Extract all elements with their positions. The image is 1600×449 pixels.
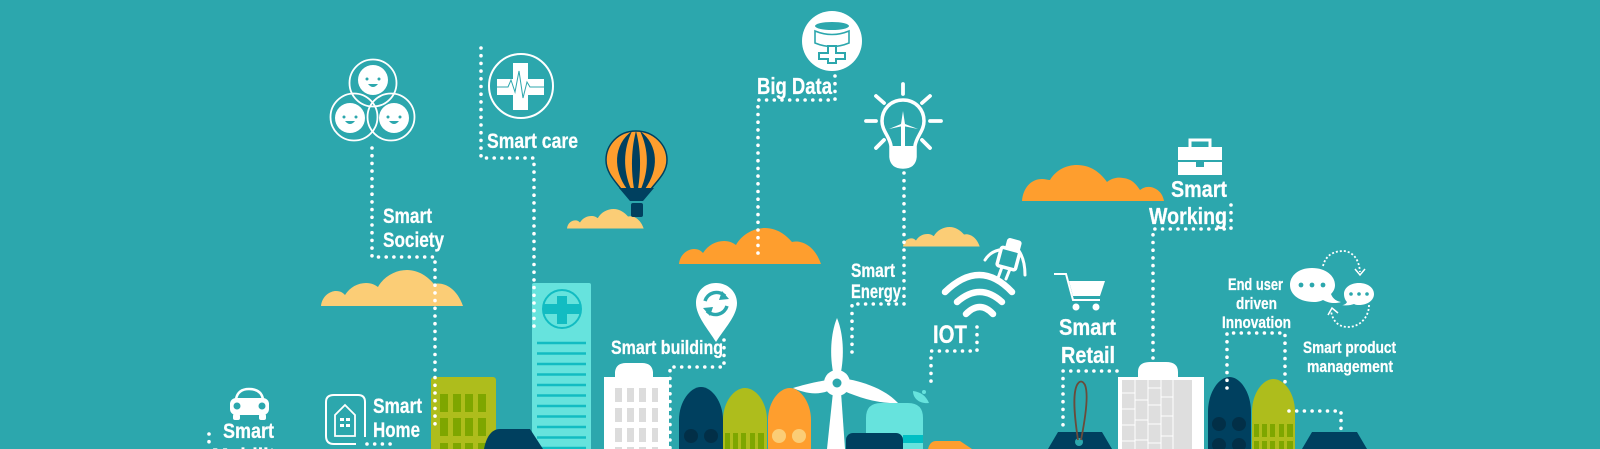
building: white smart building bbox=[604, 363, 669, 449]
cloud: pale large bbox=[321, 270, 463, 306]
icon: car bbox=[230, 389, 269, 420]
icon: hot air balloon bbox=[606, 131, 667, 217]
label: Smart Home bbox=[373, 395, 422, 442]
dome: orange bbox=[768, 388, 811, 449]
label: Smart Society: Society bbox=[383, 229, 444, 252]
label: Smart Energy bbox=[851, 261, 901, 303]
building: green left bbox=[431, 377, 496, 449]
label: End user driven Innovation bbox=[1222, 275, 1291, 332]
dome: navy bbox=[679, 387, 723, 449]
icon: speech bubbles with cycle bbox=[1290, 251, 1374, 327]
label: Smart product management bbox=[1303, 338, 1396, 376]
dotted connector lines bbox=[209, 48, 1341, 449]
building: hospital tower bbox=[532, 283, 591, 449]
cloud: orange centre bbox=[679, 228, 821, 264]
label: Smart product management: Smart product bbox=[1303, 338, 1396, 357]
label: Smart Working: Smart bbox=[1171, 176, 1227, 202]
wind turbine bbox=[793, 318, 898, 449]
label: Smart Society bbox=[383, 205, 444, 252]
label: End user driven Innovation: Innovation bbox=[1222, 313, 1291, 332]
label: Smart Energy: Energy bbox=[851, 282, 901, 303]
cloud: pale small left bbox=[567, 209, 644, 228]
icon: briefcase bbox=[1178, 140, 1222, 175]
dome: green bbox=[723, 388, 767, 449]
label: Smart Energy: Smart bbox=[851, 261, 896, 282]
icon: shopping cart bbox=[1054, 274, 1105, 310]
label: Smart Mobility bbox=[212, 420, 286, 449]
icon: location pin with refresh bbox=[696, 283, 737, 342]
label: End user driven Innovation: driven bbox=[1236, 294, 1277, 313]
label: Smart Home: Smart bbox=[373, 395, 422, 418]
cloud: pale small right bbox=[903, 227, 980, 246]
building: white grid tower bbox=[1118, 362, 1204, 449]
icon: database, big data bbox=[802, 11, 862, 71]
building: orange roof bbox=[928, 441, 972, 449]
building: dark roof left bbox=[484, 429, 543, 449]
label: Smart building: Smart building bbox=[611, 338, 723, 359]
label: End user driven Innovation: End user bbox=[1228, 275, 1283, 294]
dome: green right bbox=[1252, 379, 1295, 449]
label: Big Data: Big Data bbox=[757, 73, 832, 99]
icon: medical cross, smart care bbox=[489, 54, 553, 118]
cloud: orange right bbox=[1022, 165, 1164, 201]
label: Smart Working bbox=[1149, 176, 1227, 229]
label: IOT: IOT bbox=[933, 321, 967, 349]
building: dark roof right bbox=[1302, 432, 1367, 449]
label: Smart Retail: Retail bbox=[1061, 342, 1115, 368]
label: Smart care: Smart care bbox=[487, 130, 578, 153]
price tag bbox=[1048, 382, 1112, 449]
dome: navy right bbox=[1208, 377, 1251, 449]
icon: light bulb with turbine bbox=[866, 84, 941, 167]
icon: smart home bbox=[326, 395, 365, 444]
icon: wifi bbox=[945, 275, 1012, 314]
label: Smart Society: Smart bbox=[383, 205, 432, 228]
label: Smart Retail bbox=[1059, 314, 1116, 368]
icon: three faces, smart society bbox=[330, 60, 414, 140]
label: Smart Retail: Smart bbox=[1059, 314, 1116, 340]
label: Smart Mobility: Smart bbox=[223, 420, 274, 443]
label: Smart product management: management bbox=[1307, 357, 1393, 376]
label: Smart Home: Home bbox=[373, 419, 420, 442]
icon: robot bbox=[985, 237, 1025, 279]
label: Smart Working: Working bbox=[1149, 203, 1227, 229]
building: aqua with dish bbox=[846, 390, 929, 449]
